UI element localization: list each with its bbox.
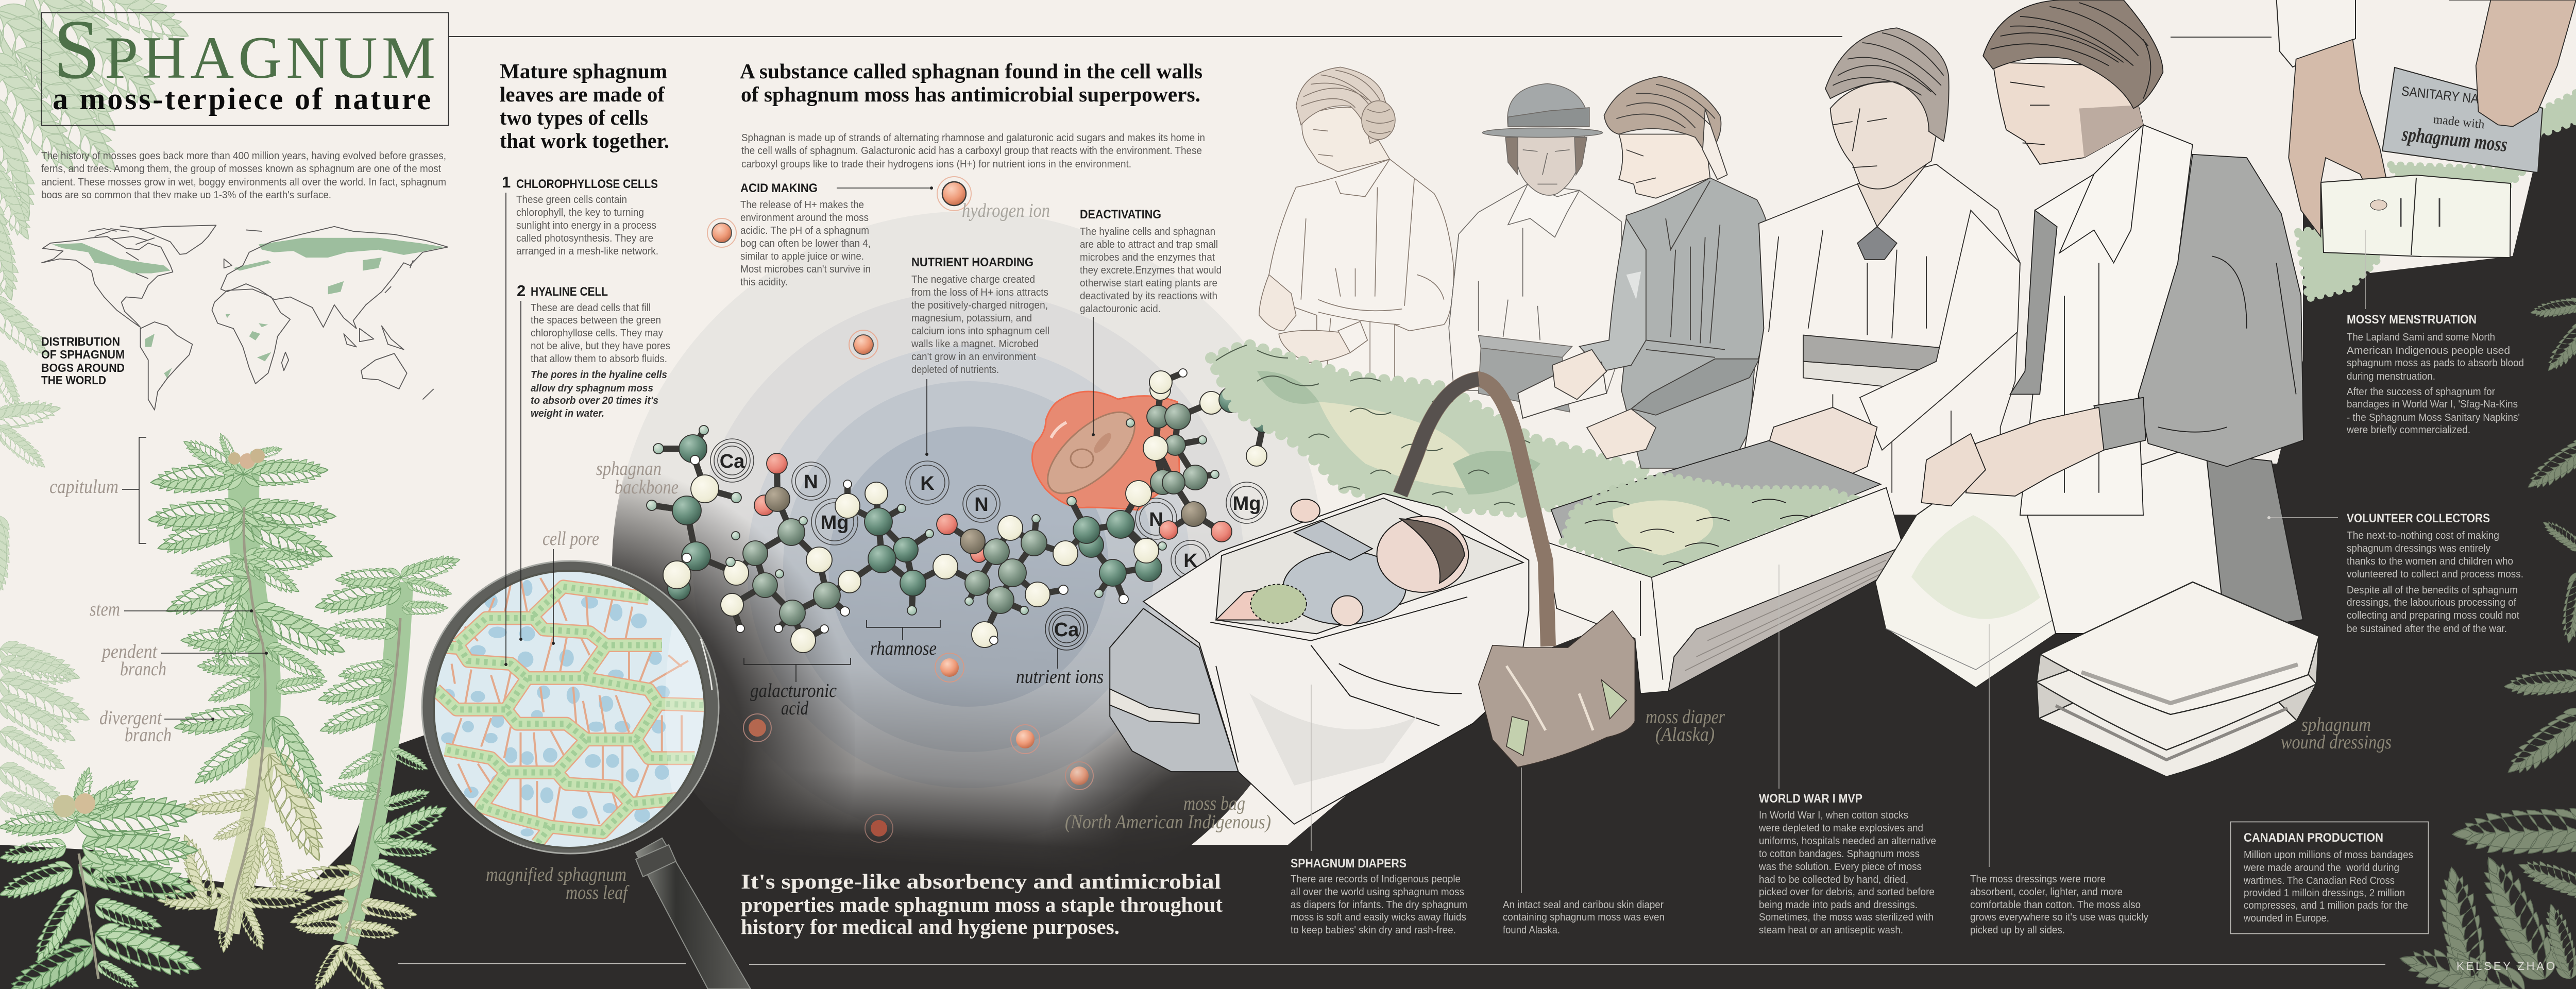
heading: two types of cells: Mature sphagnum — [500, 59, 667, 83]
cell type 2: hyaline — [517, 282, 670, 419]
folded pad — [2321, 175, 2511, 258]
upper moss tray — [1211, 344, 1649, 513]
concentric bubble background — [612, 211, 1320, 865]
moss plant: bottom-left specimen — [0, 765, 206, 989]
head — [1993, 62, 2143, 164]
dressing 1 — [2040, 582, 2319, 714]
collar and tie — [1857, 164, 1926, 227]
acid making text: The release of H+ makes the — [740, 199, 864, 211]
intro text: ancient. These mosses grow in wet, boggy environments all over the world. In fact, sphagnum — [41, 177, 446, 188]
moss basket handle — [1400, 379, 1548, 646]
deactivating text: DEACTIVATING — [1080, 208, 1161, 221]
cell type 1: chlorophyllose: These green cells contain — [516, 194, 627, 206]
left callout lines — [122, 193, 555, 721]
grey dress — [1621, 178, 1774, 468]
cell type 1: chlorophyllose: sunlight into energy in a process — [516, 220, 656, 231]
world war I text: was the solution. Every piece of moss — [1758, 861, 1922, 873]
moss: pale left plant — [0, 641, 90, 823]
sphagnum diapers text: as diapers for infants. The dry sphagnum — [1291, 899, 1467, 911]
stack silhouette — [2037, 582, 2319, 777]
cell type 2: hyaline: to absorb over 20 times it's — [531, 395, 658, 406]
illustration labels: wound dressings — [2281, 731, 2392, 753]
nutrient hoarding text: magnesium, potassium, and — [911, 313, 1032, 324]
molecule labels: sphagnan — [596, 458, 662, 480]
volunteer collectors text: VOLUNTEER COLLECTORS — [2347, 511, 2490, 525]
heading: antimicrobial superpowers — [740, 59, 1202, 106]
nutrient hoarding text: the positively-charged nitrogen, — [911, 300, 1048, 311]
cell type 1: chlorophyllose — [502, 173, 658, 257]
world war I text: to cotton bandages. Sphagnum moss — [1759, 848, 1920, 860]
tray interior — [1551, 440, 1880, 577]
closing statement — [741, 869, 1223, 939]
alaska diaper text: found Alaska. — [1503, 925, 1560, 936]
white wrap — [1143, 493, 1529, 824]
deactivating text: they excrete.Enzymes that would — [1080, 265, 1222, 276]
cell type 2: hyaline: allow dry sphagnum moss — [531, 383, 653, 394]
credit: KELSEY ZHAO — [2456, 960, 2555, 973]
box label: SANITARY NAPKINS — [2401, 83, 2515, 110]
volunteer collectors text: volunteered to collect and process moss. — [2347, 569, 2523, 580]
acid making text: acidic. The pH of a sphagnum — [740, 225, 869, 236]
dress — [1449, 184, 1624, 393]
mossy menstruation text: MOSSY MENSTRUATION — [2347, 313, 2477, 327]
volunteer collectors text: be sustained after the end of the war. — [2347, 623, 2507, 635]
map caption: BOGS AROUND — [41, 361, 125, 374]
magnifying glass with cell mesh — [422, 561, 751, 989]
moss anatomy labels — [49, 476, 599, 746]
world war I text: Sometimes, the moss was sterilized with — [1759, 912, 1934, 923]
dressing 3 — [2039, 685, 2297, 777]
moss dressings text: comfortable than cotton. The moss also — [1970, 899, 2141, 911]
deactivating text: otherwise start eating plants are — [1080, 278, 1217, 289]
acid making text: environment around the moss — [740, 212, 869, 224]
moss anatomy labels: stem — [90, 599, 120, 620]
magnifier caption: magnified sphagnum — [486, 864, 626, 885]
subtitle: a moss-terpiece of nature — [53, 82, 431, 116]
illustration labels — [1065, 706, 2392, 833]
canadian production box: were made around the world during — [2243, 862, 2399, 874]
mossy menstruation text — [2346, 313, 2524, 436]
moss plant: centre specimen — [147, 431, 351, 953]
woman 4 — [1744, 28, 2020, 515]
right-side callout lines — [1311, 230, 2365, 893]
title box — [41, 2, 448, 126]
heading: antimicrobial superpowers: A substance called sphagnan found in the cell walls — [740, 59, 1202, 83]
cell type 1: chlorophyllose: CHLOROPHYLLOSE CELLS — [516, 177, 658, 191]
mossy menstruation text: bandages in World War I, 'Sfag-Na-Kins — [2347, 399, 2518, 410]
moss anatomy labels: capitulum — [49, 476, 118, 498]
nutrient ions: Ca — [1054, 619, 1079, 641]
cell type 2: hyaline: weight in water. — [531, 408, 604, 419]
heading: antimicrobial superpowers: of sphagnum moss has antimicrobial superpowers. — [741, 82, 1200, 106]
illustration labels: moss bag — [1183, 793, 1245, 814]
intro text: The history of mosses goes back more than 400 million years, having evolved before grasses, — [41, 150, 446, 162]
world war I text: uniforms, hospitals needed an alternative — [1759, 835, 1936, 847]
cell type 2: hyaline: that allow them to absorb fluids. — [531, 353, 667, 365]
mossy menstruation text: during menstruation. — [2347, 371, 2435, 382]
sphagnum diapers text: There are records of Indigenous people — [1291, 874, 1461, 885]
nutrient hoarding text: can't grow in an environment — [911, 351, 1036, 363]
heading: two types of cells: that work together. — [500, 129, 669, 152]
sphagnum diapers text: SPHAGNUM DIAPERS — [1291, 857, 1406, 871]
moss dressings text: grows everywhere so it's use was quickly — [1970, 912, 2148, 923]
moss anatomy labels: branch — [125, 724, 172, 746]
moss: pale top-left fronds — [0, 0, 197, 598]
canadian production box: CANADIAN PRODUCTION — [2244, 831, 2383, 845]
world war I text: had to be collected by hand, dried, — [1759, 874, 1908, 885]
volunteer collectors text: collecting and preparing moss could not — [2347, 610, 2519, 621]
molecule labels — [596, 200, 1104, 719]
volunteer collectors text: thanks to the women and children who — [2347, 556, 2513, 567]
woman 3 — [1518, 76, 1774, 468]
sphagnan intro text: Sphagnan is made up of strands of alternating rhamnose and galaturonic acid sugars and makes its home in — [741, 132, 1205, 144]
world war I text: WORLD WAR I MVP — [1759, 792, 1862, 806]
sleeve — [2138, 155, 2303, 467]
canadian production box: wounded in Europe. — [2243, 913, 2329, 924]
moss anatomy labels: cell pore — [543, 528, 599, 550]
leaf cell mesh — [432, 569, 711, 849]
nutrient hoarding text: from the loss of H+ ions attracts — [911, 287, 1048, 298]
closing statement: It's sponge-like absorbency and antimicrobial — [741, 869, 1221, 893]
map caption: DISTRIBUTION — [41, 335, 120, 348]
world war I text: being made into pads and dressings. — [1759, 899, 1918, 911]
volunteer collectors text: sphagnum dressings was entirely — [2347, 543, 2490, 554]
illustration labels: sphagnum — [2301, 714, 2371, 736]
sphagnan intro text: carboxyl groups like to trade their hydrogens ions (H+) for nutrient ions in the environment. — [741, 159, 1131, 170]
canadian production box: provided 1 milloin dressings, 2 million — [2244, 888, 2405, 899]
nutrient hoarding text: depleted of nutrients. — [911, 364, 999, 376]
box label — [2396, 83, 2515, 157]
closing statement: properties made sphagnum moss a staple throughout — [741, 893, 1223, 916]
head — [1619, 134, 1710, 198]
mossy menstruation text: sphagnum moss as pads to absorb blood — [2347, 357, 2524, 369]
head — [1831, 82, 1941, 189]
mossy menstruation text: American Indigenous people used — [2347, 345, 2510, 356]
intro text: ferns, and trees. Among them, the group of mosses known as sphagnum are one of the most — [41, 163, 441, 175]
deactivating text: microbes and the enzymes that — [1080, 252, 1215, 263]
magnifier caption: moss leaf — [566, 882, 630, 903]
cell type 2: hyaline: The pores in the hyaline cells — [531, 369, 667, 381]
woman 2 — [1449, 83, 1624, 412]
intro text: bogs are so common that they make up 1-3% of the earth's surface. — [41, 190, 331, 201]
molecule labels: acid — [781, 697, 809, 719]
map caption — [41, 335, 125, 387]
cell type 2: hyaline: These are dead cells that fill — [531, 302, 651, 314]
heading: two types of cells: two types of cells — [500, 106, 648, 129]
moss behind pad — [2298, 93, 2576, 299]
cell type 2: hyaline: not be alive, but they have pores — [531, 340, 670, 352]
cell type 1: chlorophyllose: chlorophyll, the key to turning — [516, 207, 644, 218]
lens rim — [422, 561, 719, 854]
nutrient hoarding text — [911, 255, 1049, 376]
hydrogen ions — [707, 177, 1093, 842]
cell type 1: chlorophyllose: called photosynthesis. They are — [516, 233, 653, 244]
volunteer collectors text: The next-to-nothing cost of making — [2347, 530, 2499, 541]
right hand — [2449, 0, 2576, 127]
sphagnan molecule — [647, 352, 1275, 653]
world war I text: were depleted to make explosives and — [1758, 823, 1923, 834]
white drape — [1546, 488, 1903, 693]
bog distribution patches — [52, 238, 445, 379]
nutrient ions: Mg — [1233, 493, 1261, 515]
nutrient hoarding text: The negative charge created — [911, 274, 1035, 285]
world war I text: steam heat or an antiseptic wash. — [1759, 925, 1903, 936]
mossy menstruation text: The Lapland Sami and some North — [2347, 332, 2495, 343]
nutrient ions: N — [974, 494, 989, 516]
moss dressings text: picked up by all sides. — [1970, 925, 2065, 936]
nutrient ions: N — [804, 471, 818, 493]
cell type 2: hyaline: chlorophyllose cells. They may — [531, 328, 663, 339]
cell type 1: chlorophyllose: 1 — [502, 173, 511, 191]
woman 1 — [1259, 67, 1454, 396]
seal skin moss diaper — [1479, 611, 1635, 767]
moss anatomy labels: branch — [120, 658, 166, 680]
canadian production box: wartimes. The Canadian Red Cross — [2243, 875, 2395, 886]
cell type 2: hyaline: 2 — [517, 282, 526, 300]
hands with sanitary napkin box — [2276, 0, 2576, 299]
deactivating text: deactivated by its reactions with — [1080, 291, 1217, 302]
lens inner edge — [434, 571, 705, 848]
alaska diaper text — [1503, 899, 1665, 936]
molecule labels: hydrogen ion — [962, 200, 1050, 221]
title: SPHAGNUM — [53, 2, 435, 96]
molecule labels: galacturonic — [750, 680, 837, 702]
sphagnum diapers text: moss is soft and easily wicks away fluids — [1291, 912, 1466, 923]
canadian production box: compresses, and 1 million pads for the — [2244, 900, 2408, 911]
molecule labels: nutrient ions — [1016, 666, 1104, 688]
box — [2382, 67, 2543, 173]
cloth in hands — [1875, 464, 2074, 688]
mossy menstruation text: After the success of sphagnum for — [2347, 386, 2495, 398]
sphagnan intro text: the cell walls of sphagnum. Galacturonic acid has a carboxyl group that reacts with the environment. These — [741, 145, 1202, 157]
map caption: OF SPHAGNUM — [41, 348, 125, 361]
deactivating text: The hyaline cells and sphagnan — [1080, 226, 1215, 237]
acid making text: ACID MAKING — [740, 181, 818, 195]
intro text — [41, 150, 446, 201]
deactivating text: are able to attract and trap small — [1080, 239, 1218, 250]
box label: made with — [2433, 113, 2485, 131]
nutrient ions: Ca — [720, 451, 745, 472]
cell type 1: chlorophyllose: arranged in a mesh-like network. — [516, 246, 658, 257]
illustration labels: (Alaska) — [1655, 724, 1715, 745]
world map of sphagnum bogs — [42, 225, 448, 410]
alaska diaper text: containing sphagnum moss was even — [1503, 912, 1665, 923]
sphagnan intro text — [741, 132, 1205, 170]
acid making text: Most microbes can't survive in — [740, 264, 871, 275]
dressing 2 — [2037, 649, 2316, 750]
head and hat — [1515, 134, 1584, 195]
baby in moss bag — [1110, 493, 1529, 824]
woman 5 — [1922, 0, 2303, 634]
moss plant: right specimen — [278, 551, 463, 989]
acid making text: similar to apple juice or wine. — [740, 251, 864, 262]
lower apron — [2025, 443, 2226, 634]
sphagnum diapers text — [1291, 857, 1467, 936]
moss dressings text: absorbent, cooler, lighter, and more — [1970, 886, 2123, 898]
closing statement: history for medical and hygiene purposes. — [741, 915, 1120, 939]
deactivating text — [1080, 208, 1222, 315]
illustration labels: moss diaper — [1646, 706, 1725, 728]
magnifier handle — [636, 838, 751, 989]
nutrient ions: K — [1183, 550, 1198, 572]
moss: dark right edge fronds — [2395, 296, 2576, 989]
canadian production box: Million upon millions of moss bandages — [2244, 849, 2413, 861]
world war I text: picked over for debris, and sorted before — [1759, 886, 1935, 898]
magnifier caption — [486, 864, 630, 903]
canadian production box — [2231, 822, 2429, 933]
wood side — [1668, 549, 1895, 691]
sphagnum diapers text: all over the world using sphagnum moss — [1291, 886, 1464, 898]
nutrient hoarding text: NUTRIENT HOARDING — [911, 255, 1033, 269]
map caption: THE WORLD — [41, 373, 106, 387]
acid making text — [740, 181, 871, 288]
alaska diaper text: An intact seal and caribou skin diaper — [1503, 899, 1664, 911]
nutrient ions: N — [1149, 509, 1163, 531]
deactivating text: galactouronic acid. — [1080, 303, 1161, 315]
acid making text: this acidity. — [740, 277, 788, 288]
left hand — [2289, 0, 2576, 236]
nutrient hoarding text: walls like a magnet. Microbed — [911, 338, 1039, 350]
moss dressings text: The moss dressings were more — [1970, 874, 2106, 885]
volunteer collectors text: Despite all of the benedits of sphagnum — [2347, 585, 2518, 596]
head — [1302, 107, 1389, 172]
wound dressings stack — [2037, 582, 2319, 777]
skirt — [2200, 453, 2303, 634]
illustration labels: (North American Indigenous) — [1065, 811, 1271, 833]
hands — [1552, 350, 1656, 459]
world war I text: In World War I, when cotton stocks — [1759, 810, 1908, 821]
lower tray with moss — [1546, 440, 1903, 693]
nutrient ions — [710, 439, 1267, 650]
molecule labels: backbone — [615, 476, 679, 498]
box label: sphagnum moss — [2401, 122, 2509, 156]
moss anatomy labels: pendent — [100, 641, 158, 662]
molecule labels: rhamnose — [870, 638, 937, 659]
continents — [42, 225, 448, 410]
cuff — [2276, 0, 2355, 67]
hands — [1764, 407, 1877, 489]
baby — [1216, 498, 1523, 634]
blouse sleeve — [1860, 210, 2020, 450]
molecule callout lines and brackets — [744, 186, 1095, 682]
moss bag back — [1110, 608, 1239, 772]
moss anatomy labels: divergent — [99, 707, 162, 729]
volunteer collectors text: dressings, the labourious processing of — [2347, 597, 2516, 608]
nutrient hoarding text: calcium ions into sphagnum cell — [911, 326, 1049, 337]
cell type 2: hyaline: the spaces between the green — [531, 315, 661, 326]
cell type 2: hyaline: HYALINE CELL — [531, 285, 608, 299]
world war I text — [1758, 792, 1936, 936]
acid making text: bog can often be lower than 4, — [740, 238, 871, 249]
hands — [1259, 275, 1350, 362]
mossy menstruation text: were briefly commercialized. — [2346, 424, 2470, 436]
heading: two types of cells: leaves are made of — [500, 82, 665, 106]
microbe blob — [1032, 391, 1180, 510]
moss dressings text — [1970, 874, 2148, 936]
dress — [1269, 159, 1454, 396]
nutrient ions: Mg — [821, 512, 849, 534]
heading: two types of cells — [500, 59, 669, 152]
blouse — [1744, 164, 2020, 515]
nutrient ions: K — [920, 473, 935, 494]
hands — [2094, 398, 2146, 450]
mossy menstruation text: - the Sphagnum Moss Sanitary Napkins' — [2347, 412, 2520, 423]
sphagnum diapers text: to keep babies' skin dry and rash-free. — [1291, 925, 1456, 936]
volunteer collectors text — [2347, 511, 2523, 635]
apron — [2020, 125, 2193, 515]
